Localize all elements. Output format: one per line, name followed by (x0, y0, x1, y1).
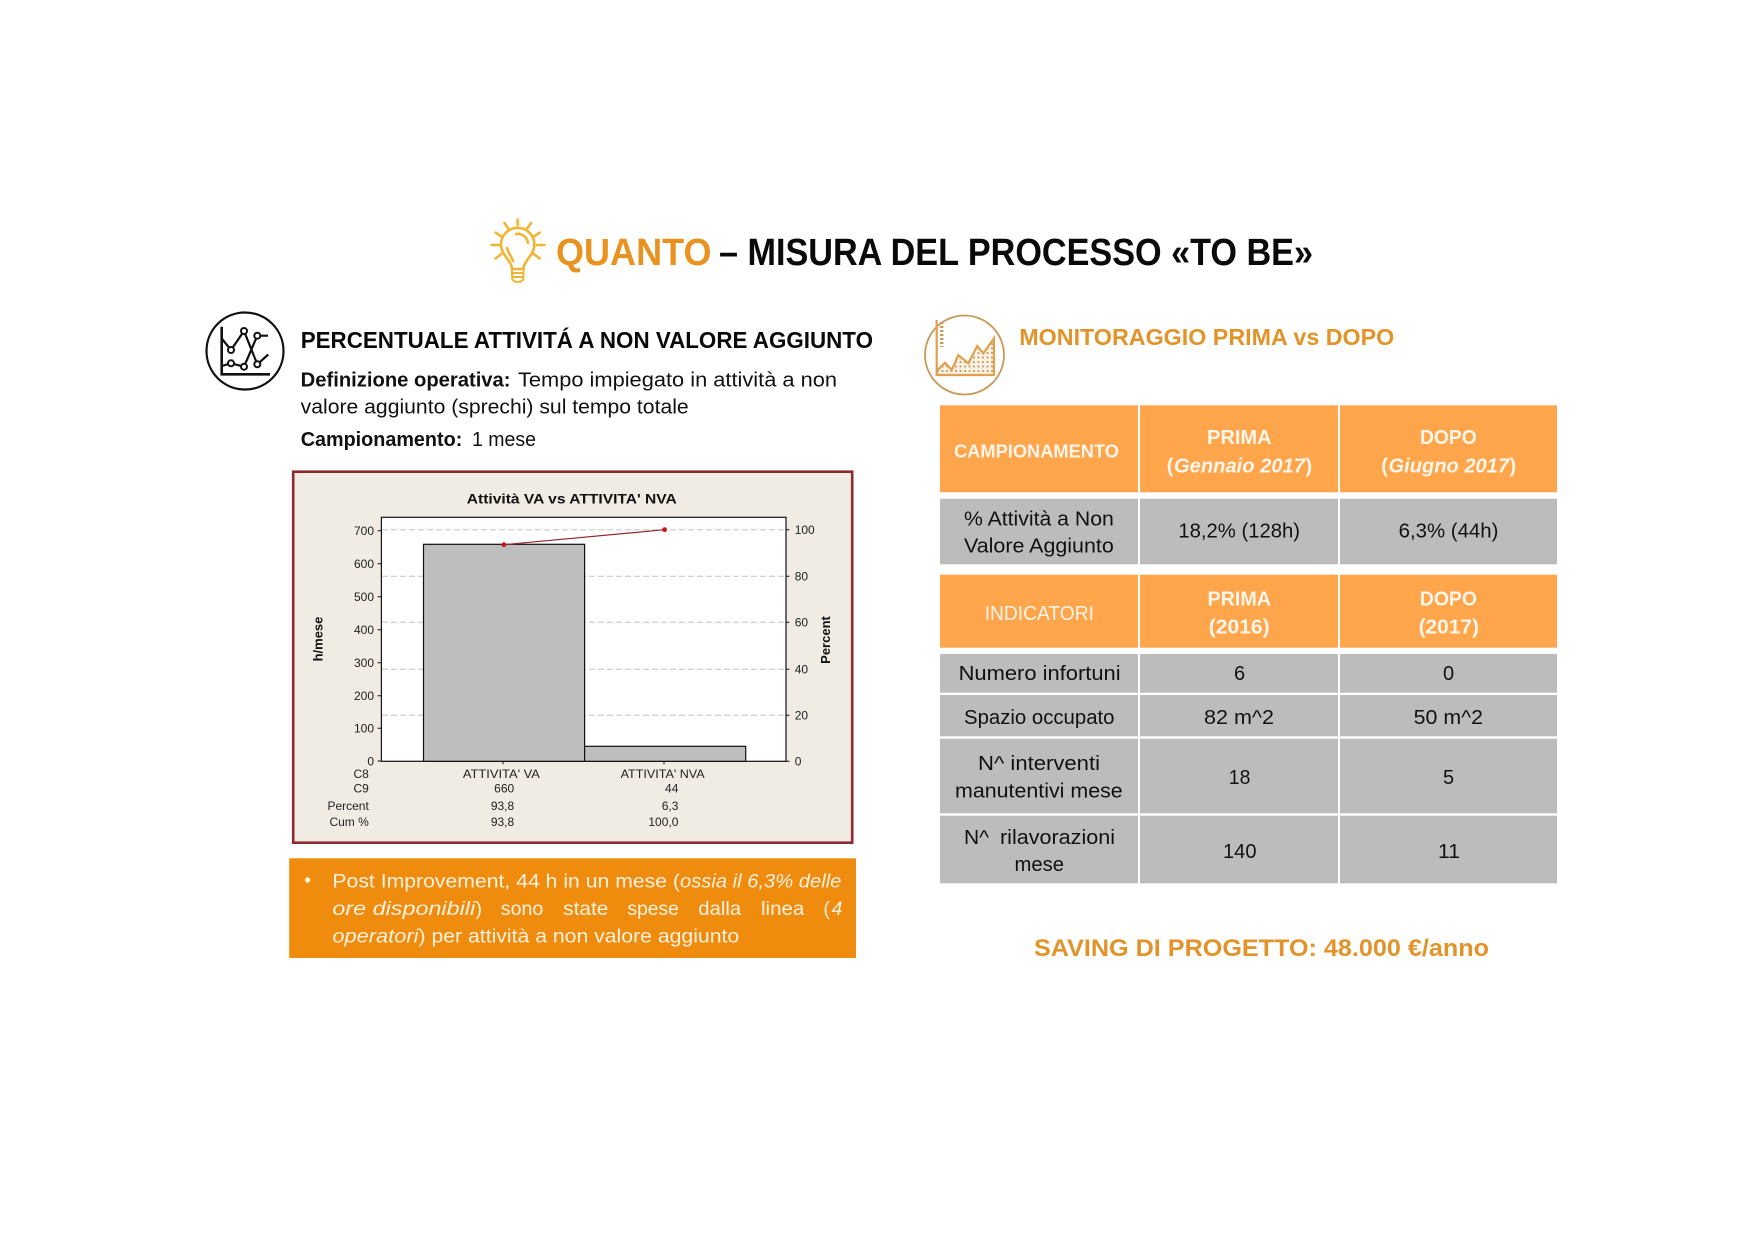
chart data table: 44 (665, 782, 679, 796)
row: rilavorazioni: rilavorazioni (1000, 827, 1115, 849)
chart data table: 660 (494, 782, 515, 796)
header row: campionamento: ( (1167, 455, 1174, 477)
row: rilavorazioni: mese (1014, 854, 1064, 876)
chart data table: 93,8 (491, 815, 515, 829)
left axis: 100 (354, 722, 374, 736)
table: indicatori (940, 575, 1557, 883)
text block: definizione operativa: Definizione operativa: (301, 370, 510, 392)
callout: post improvement: ( (823, 898, 830, 920)
header row: campionamento: Giugno 2017 (1388, 455, 1510, 477)
chart data table: C8 (353, 767, 369, 781)
right axis: 20 (795, 708, 808, 722)
title: QUANTO (556, 232, 712, 274)
row: spazio occupato (940, 695, 1557, 736)
callout: post improvement: state (563, 898, 608, 920)
callout: post improvement: operatori (332, 925, 419, 947)
saving di progetto: SAVING DI PROGETTO: 48.000 €/anno (1034, 935, 1489, 962)
callout: post improvement: ossia il 6,3% delle (680, 870, 842, 892)
left axis: 500 (354, 590, 374, 604)
header row: indicatori: INDICATORI (985, 603, 1094, 625)
text block: definizione operativa (301, 370, 837, 418)
left axis: 700 (354, 524, 374, 538)
header row: campionamento: DOPO (1420, 427, 1477, 449)
chart data table: C9 (353, 782, 369, 796)
row: spazio occupato: 82 m^2 (1204, 707, 1274, 729)
chart title: Attività VA vs ATTIVITA' NVA (467, 490, 677, 506)
row: rilavorazioni: 11 (1438, 841, 1460, 863)
chart data table: 93,8 (491, 799, 515, 813)
callout: post improvement: 4 (832, 898, 842, 920)
chart data table: 6,3 (662, 799, 679, 813)
row: % attività a non valore aggiunto: Valore Aggiunto (964, 535, 1114, 557)
row: spazio occupato: Spazio occupato (964, 707, 1114, 729)
right axis: 100 (795, 523, 815, 537)
callout: post improvement: sono (501, 898, 543, 920)
chart data table: 100,0 (648, 815, 679, 829)
text block: campionamento: Campionamento: (301, 429, 462, 451)
heading: percentuale: PERCENTUALE ATTIVITÁ A NON VALORE AGGIUNTO (301, 326, 873, 353)
chart data table: ATTIVITA' NVA (621, 767, 705, 781)
header row: indicatori: (2016) (1209, 616, 1270, 638)
header row: campionamento: Gennaio 2017 (1174, 455, 1306, 477)
header row: campionamento: ) (1306, 455, 1312, 477)
bar: attività VA (424, 544, 585, 761)
text block: campionamento (301, 429, 536, 451)
row: rilavorazioni (940, 816, 1557, 883)
row: interventi manutentivi (940, 739, 1557, 813)
icon: area chart in circle (925, 316, 1004, 394)
row: numero infortuni: 0 (1443, 663, 1454, 685)
left axis: 300 (354, 656, 374, 670)
row: interventi manutentivi: N^ interventi (978, 753, 1100, 775)
left axis: 600 (354, 557, 374, 571)
icon: light bulb (492, 220, 544, 282)
header row: campionamento (940, 405, 1557, 492)
left axis: 0 (367, 754, 374, 768)
row: interventi manutentivi: 18 (1229, 767, 1250, 789)
left axis (310, 524, 381, 768)
chart data table (327, 761, 705, 829)
callout: post improvement: ) (476, 898, 482, 920)
panel: percentuale attività a non valore aggiunto (206, 312, 873, 958)
row: numero infortuni: Numero infortuni (959, 663, 1121, 685)
right axis: Percent (818, 615, 833, 664)
header row: indicatori: (2017) (1419, 616, 1479, 638)
row: spazio occupato: 50 m^2 (1414, 707, 1483, 729)
callout: post improvement: linea (761, 898, 804, 920)
callout: post improvement: spese (628, 898, 679, 920)
chart data table: Percent (327, 799, 369, 813)
row: interventi manutentivi: 5 (1443, 767, 1454, 789)
callout: post improvement: ore disponibili (332, 898, 476, 920)
title: – MISURA DEL PROCESSO «TO BE» (719, 232, 1313, 274)
callout: post improvement (289, 858, 856, 958)
right axis: 40 (795, 662, 808, 676)
bar: attività NVA (585, 746, 746, 761)
right axis: 60 (795, 616, 808, 630)
header row: campionamento: ( (1381, 455, 1388, 477)
right axis: 80 (795, 570, 808, 584)
callout: post improvement: Post Improvement, 44 h in un mese ( (332, 870, 681, 892)
cumulative line (502, 527, 667, 547)
text block: definizione operativa: Tempo impiegato in attività a non (518, 370, 837, 392)
left axis: 200 (354, 689, 374, 703)
row: interventi manutentivi: manutentivi mese (955, 781, 1123, 803)
header row: campionamento: ) (1510, 455, 1516, 477)
row: numero infortuni (940, 654, 1557, 693)
chart data table: ATTIVITA' VA (463, 767, 540, 781)
row: % attività a non valore aggiunto: 6,3% (44h) (1399, 521, 1498, 543)
text block: campionamento: 1 mese (472, 429, 536, 451)
left axis: h/mese (310, 617, 326, 661)
header row: campionamento: CAMPIONAMENTO (954, 441, 1119, 461)
header row: indicatori: PRIMA (1208, 589, 1271, 611)
chart data table: Cum % (329, 815, 369, 829)
text block: definizione operativa: valore aggiunto (sprechi) sul tempo totale (301, 396, 689, 418)
header row: indicatori: DOPO (1420, 589, 1477, 611)
row: numero infortuni: 6 (1234, 663, 1245, 685)
table: campionamento (940, 405, 1557, 564)
panel: monitoraggio prima vs dopo (925, 316, 1557, 962)
row: rilavorazioni: N^ (964, 827, 990, 849)
icon: line chart in circle (206, 312, 284, 390)
callout: post improvement: dalla (698, 898, 741, 920)
callout: post improvement: ) per attività a non valore aggiunto (418, 925, 739, 947)
row: % attività a non valore aggiunto (940, 499, 1557, 564)
row: % attività a non valore aggiunto: 18,2% (128h) (1178, 521, 1300, 543)
row: rilavorazioni: 140 (1223, 841, 1256, 863)
right axis: 0 (795, 754, 802, 768)
left axis: 400 (354, 623, 374, 637)
right axis (786, 523, 833, 768)
chart: pareto VA vs NVA (293, 472, 852, 843)
header row: campionamento: PRIMA (1207, 427, 1272, 449)
heading: monitoraggio: MONITORAGGIO PRIMA vs DOPO (1019, 324, 1394, 350)
row: % attività a non valore aggiunto: % Attività a Non (964, 509, 1114, 531)
header row: indicatori (940, 575, 1557, 648)
